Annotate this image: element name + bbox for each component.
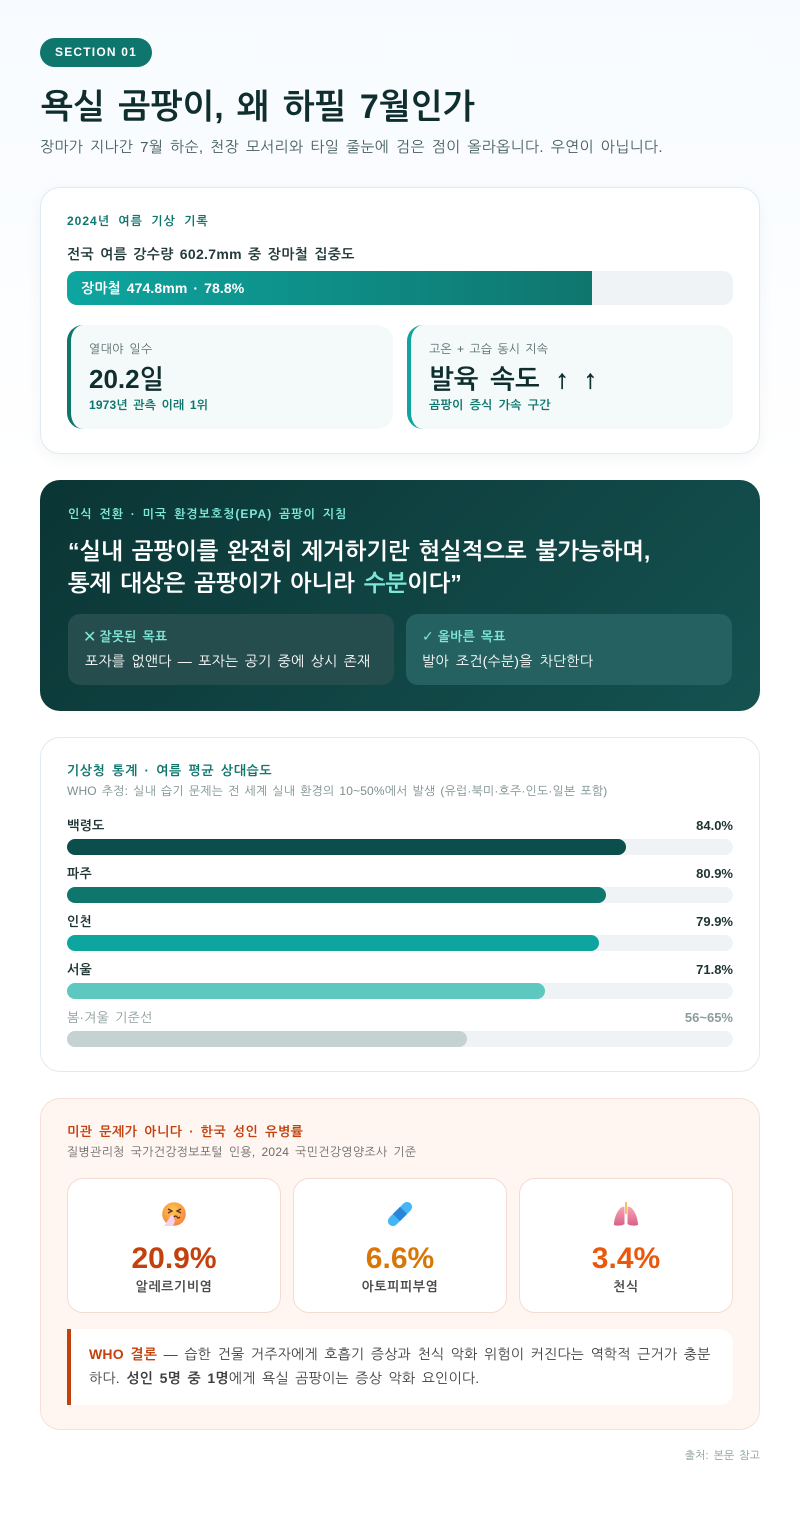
- chart note: WHO 추정: 실내 습기 문제는 전 세계 실내 환경의 10~50%에서 발생 (유럽·북미·호주·인도·일본 포함): [67, 784, 607, 798]
- name: 아토피피부염: [362, 1279, 438, 1294]
- icon: sneezing face: [162, 1202, 186, 1226]
- rainfall bar fill: 장마철 474.8mm · 78.8%: [81, 280, 244, 296]
- name: 알레르기비염: [136, 1279, 212, 1294]
- wrong goal heading: ✕ 잘못된 목표: [83, 627, 167, 646]
- panel label: 2024년 여름 기상 기록: [67, 214, 209, 228]
- WHO conclusion callout: 하다. 성인 5명 중 1명에게 욕실 곰팡이는 증상 악화 요인이다.: [89, 1370, 479, 1386]
- value: 20.9%: [131, 1242, 217, 1275]
- prevalence heading: 미관 문제가 아니다 · 한국 성인 유병률: [67, 1124, 303, 1139]
- stat label: 열대야 일수: [89, 342, 153, 356]
- stat value: 발육 속도 ↑ ↑: [429, 364, 597, 394]
- WHO conclusion callout: [67, 1329, 733, 1405]
- WHO conclusion callout: WHO 결론 — 습한 건물 거주자에게 호흡기 증상과 천식 악화 위험이 커진다는 역학적 근거가 충분: [89, 1346, 711, 1362]
- bar: Baengnyeongdo: 백령도: [67, 818, 105, 833]
- bar: Seoul: 71.8%: [696, 962, 733, 977]
- section badge: [40, 38, 152, 67]
- icon: lungs: [614, 1202, 638, 1226]
- bar: Incheon: 79.9%: [696, 914, 733, 929]
- prevalence note: 질병관리청 국가건강정보포털 인용, 2024 국민건강영양조사 기준: [67, 1145, 416, 1159]
- quote text: “실내 곰팡이를 완전히 제거하기란 현실적으로 불가능하며,: [68, 538, 650, 564]
- right goal box: [406, 614, 732, 685]
- bar: Seoul: [67, 962, 733, 999]
- stat label: 고온 + 고습 동시 지속: [429, 342, 548, 356]
- bar: spring and winter baseline: 56~65%: [685, 1010, 733, 1025]
- quote text: [68, 538, 650, 596]
- panel: summer weather record: [40, 187, 760, 454]
- bar: spring and winter baseline: 봄·겨울 기준선: [67, 1010, 153, 1025]
- panel: humidity chart: [40, 737, 760, 1072]
- bar: Paju: 파주: [67, 866, 92, 881]
- wrong goal box: [68, 614, 394, 685]
- quote label: 인식 전환 · 미국 환경보호청(EPA) 곰팡이 지침: [68, 507, 347, 521]
- name: 천식: [613, 1279, 639, 1294]
- bar: Incheon: 인천: [67, 914, 92, 929]
- bar: Baengnyeongdo: 84.0%: [696, 818, 733, 833]
- rainfall heading: 전국 여름 강수량 602.7mm 중 장마철 집중도: [67, 246, 355, 262]
- bar: Baengnyeongdo: [67, 818, 733, 855]
- bar: Incheon: [67, 914, 733, 951]
- stat: growth speed: [407, 325, 733, 429]
- rainfall bar: [67, 271, 733, 305]
- stat card: atopic dermatitis: [293, 1178, 507, 1313]
- chart heading: 기상청 통계 · 여름 평균 상대습도: [67, 763, 272, 778]
- subtitle: 장마가 지나간 7월 하순, 천장 모서리와 타일 줄눈에 검은 점이 올라옵니다. 우연이 아닙니다.: [40, 139, 663, 156]
- bar: Paju: 80.9%: [696, 866, 733, 881]
- source note: 출처: 본문 참고: [685, 1450, 760, 1462]
- section badge: SECTION 01: [55, 45, 137, 59]
- stat: tropical nights: [67, 325, 393, 429]
- icon: bandage: [388, 1202, 412, 1226]
- right goal heading: ✓ 올바른 목표: [422, 629, 506, 645]
- stat note: 1973년 관측 이래 1위: [89, 398, 208, 412]
- bar: Paju: [67, 866, 733, 903]
- stat note: 곰팡이 증식 가속 구간: [429, 398, 551, 412]
- stat card: allergic rhinitis: [67, 1178, 281, 1313]
- rainfall bar fill: [67, 271, 592, 305]
- panel: prevalence: [40, 1098, 760, 1430]
- stat card: asthma: [519, 1178, 733, 1313]
- right goal text: 발아 조건(수분)을 차단한다: [422, 653, 593, 669]
- value: 3.4%: [592, 1242, 660, 1275]
- stat value: 20.2일: [89, 364, 164, 394]
- bar: spring and winter baseline: [67, 1010, 733, 1047]
- bar: Seoul: 서울: [67, 962, 92, 977]
- title: 욕실 곰팡이, 왜 하필 7월인가: [41, 88, 475, 126]
- wrong goal text: 포자를 없앤다 — 포자는 공기 중에 상시 존재: [85, 653, 370, 669]
- value: 6.6%: [366, 1242, 434, 1275]
- panel: EPA quote: [40, 480, 760, 711]
- quote text: 통제 대상은 곰팡이가 아니라 수분이다”: [68, 570, 462, 596]
